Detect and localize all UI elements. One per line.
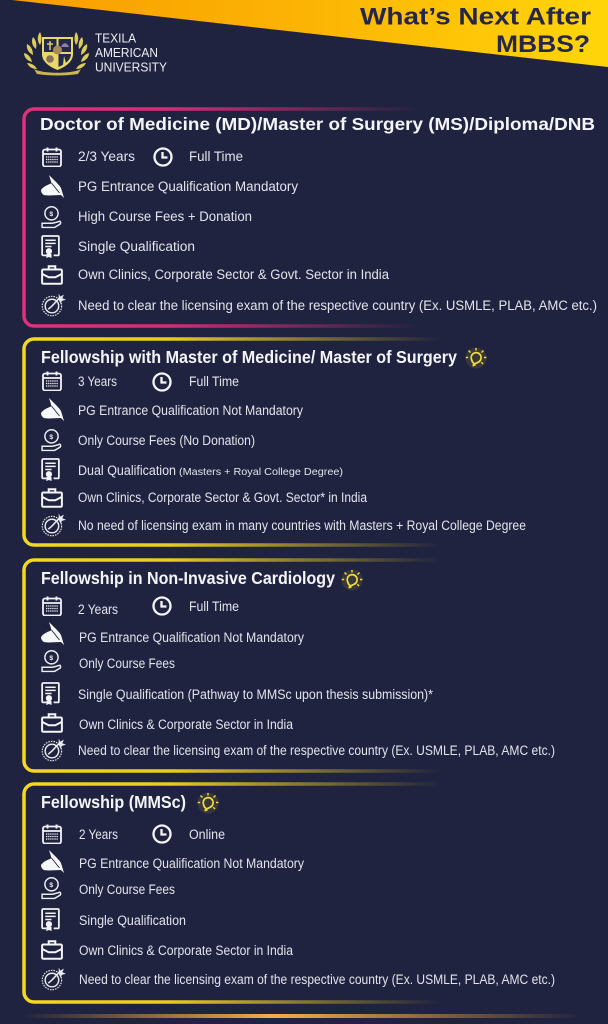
heading: Fellowship with Master of Medicine/ Master of Surgery bbox=[41, 347, 457, 367]
row: duration bbox=[43, 596, 239, 617]
logo wordmark bbox=[95, 30, 167, 74]
row: licensing bbox=[42, 294, 597, 316]
row: entrance: PG Entrance Qualification Not Mandatory bbox=[78, 403, 303, 418]
row: fees bbox=[42, 207, 252, 227]
logo wordmark: TEXILA bbox=[95, 30, 136, 46]
row: licensing bbox=[42, 739, 555, 761]
row: fees bbox=[42, 878, 175, 898]
row: entrance bbox=[41, 850, 304, 873]
row: duration: 3 Years bbox=[78, 374, 117, 389]
panel: Fellowship in Non-Invasive Cardiology bbox=[24, 560, 608, 771]
panel border bbox=[24, 784, 608, 1002]
icon: light bulb bbox=[198, 792, 218, 814]
row: fees bbox=[42, 651, 175, 671]
row: fees: Only Course Fees bbox=[79, 656, 175, 671]
heading: Fellowship in Non-Invasive Cardiology bbox=[41, 568, 335, 588]
row: career bbox=[42, 941, 293, 959]
title bbox=[360, 4, 591, 58]
row: fees: Only Course Fees (No Donation) bbox=[78, 433, 255, 448]
bottom glow bar bbox=[22, 1014, 582, 1018]
row: career: Own Clinics, Corporate Sector & Govt. Sector in India bbox=[78, 267, 389, 282]
row: duration: Full Time bbox=[189, 599, 239, 614]
row: entrance bbox=[41, 622, 304, 645]
row: fees: Only Course Fees bbox=[79, 882, 175, 897]
row: qualification: Dual Qualification bbox=[78, 463, 176, 478]
row: duration: Full Time bbox=[189, 374, 239, 389]
heading: Doctor of Medicine (MD)/Master of Surgery (MS)/Diploma/DNB bbox=[40, 114, 595, 134]
row: entrance: PG Entrance Qualification Not Mandatory bbox=[79, 856, 304, 871]
row: career bbox=[42, 714, 293, 732]
panel border bbox=[24, 339, 608, 545]
title: What’s Next After bbox=[360, 4, 591, 30]
row: duration bbox=[43, 148, 243, 166]
row: licensing bbox=[42, 968, 555, 990]
row: qualification bbox=[42, 909, 186, 931]
row: career bbox=[42, 489, 367, 507]
row: duration: Online bbox=[189, 827, 225, 842]
row: duration bbox=[43, 372, 239, 390]
row: qualification: Single Qualification bbox=[78, 239, 195, 254]
row: licensing bbox=[42, 514, 526, 536]
icon: light bulb bbox=[342, 570, 362, 590]
row: duration: 2/3 Years bbox=[78, 149, 135, 164]
panel: Fellowship with Master of Medicine / Surgery bbox=[24, 339, 608, 545]
row: fees bbox=[42, 430, 255, 450]
row: qualification: (Masters + Royal College Degree) bbox=[179, 466, 343, 478]
row: qualification bbox=[42, 459, 343, 481]
logo wordmark: UNIVERSITY bbox=[95, 60, 167, 74]
row: entrance bbox=[41, 175, 298, 198]
panel: Fellowship (MMSc) bbox=[24, 784, 608, 1002]
row: licensing: Need to clear the licensing exam of the respective country (Ex. USMLE, PLAB, AMC etc.) bbox=[79, 972, 555, 987]
panel border bbox=[24, 109, 608, 326]
logo wordmark: AMERICAN bbox=[95, 45, 158, 60]
row: entrance: PG Entrance Qualification Mandatory bbox=[78, 179, 298, 194]
row: duration bbox=[43, 824, 225, 844]
logo: Texila American University bbox=[24, 30, 167, 76]
row: entrance: PG Entrance Qualification Not Mandatory bbox=[79, 630, 304, 645]
heading: Fellowship (MMSc) bbox=[41, 792, 186, 812]
row: fees: High Course Fees + Donation bbox=[78, 209, 252, 224]
panel border bbox=[24, 560, 608, 771]
row: career: Own Clinics & Corporate Sector in India bbox=[79, 943, 293, 958]
title: MBBS? bbox=[496, 31, 590, 58]
row: career: Own Clinics & Corporate Sector in India bbox=[79, 717, 293, 732]
row: licensing: No need of licensing exam in many countries with Masters + Royal College Degree bbox=[78, 518, 526, 533]
icon: university crest bbox=[24, 32, 89, 76]
icon: light bulb bbox=[466, 348, 486, 368]
row: qualification: Single Qualification (Pathway to MMSc upon thesis submission)* bbox=[78, 687, 434, 702]
row: career: Own Clinics, Corporate Sector & Govt. Sector* in India bbox=[78, 490, 367, 505]
row: duration: 2 Years bbox=[78, 602, 118, 617]
row: duration: 2 Years bbox=[79, 827, 118, 842]
row: licensing: Need to clear the licensing exam of the respective country (Ex. USMLE, PLAB, AMC etc.) bbox=[78, 743, 555, 758]
header banner bbox=[12, 0, 608, 67]
row: qualification: Single Qualification bbox=[79, 913, 186, 928]
row: entrance bbox=[41, 398, 303, 421]
row: duration: Full Time bbox=[189, 149, 243, 164]
row: qualification bbox=[42, 683, 434, 705]
row: qualification bbox=[42, 236, 195, 258]
panel: MD/MS/Diploma/DNB bbox=[24, 109, 608, 326]
row: licensing: Need to clear the licensing exam of the respective country (Ex. USMLE, PLAB, AMC etc.) bbox=[78, 298, 597, 313]
